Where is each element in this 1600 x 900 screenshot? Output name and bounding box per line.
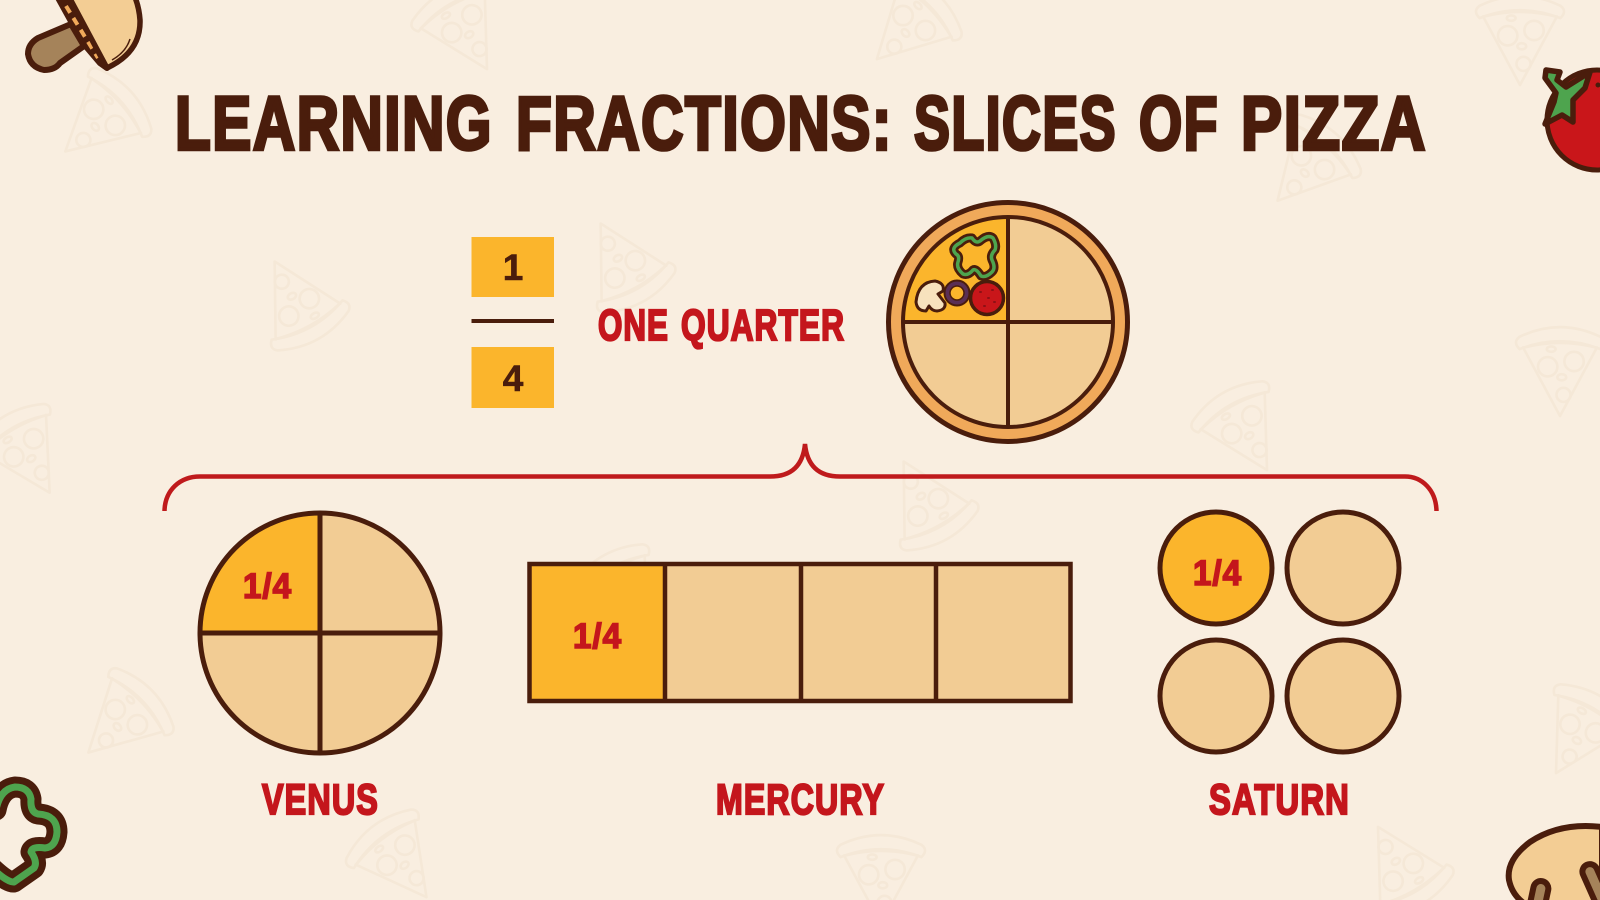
label: one quarter: QUARTER [681, 301, 845, 350]
panel: saturn circles model [1160, 512, 1399, 752]
crust [888, 202, 1128, 442]
topping: pepperoni [970, 282, 1004, 314]
title: SLICES [914, 82, 1117, 166]
panel: mercury bar model [530, 564, 1070, 701]
slice outlines [903, 217, 1113, 427]
outlines [530, 564, 1070, 701]
topping: mushroom [916, 281, 945, 311]
fraction label: 1/4 [243, 567, 292, 606]
highlighted quarter [903, 217, 1008, 322]
numerator box [472, 237, 554, 297]
title: PIZZA [1241, 82, 1427, 166]
topping: green pepper [954, 237, 996, 276]
denominator box: 4 [503, 358, 524, 399]
topping: green pepper inner [954, 237, 996, 276]
highlighted quarter [200, 513, 320, 633]
title: LEARNING [175, 82, 493, 166]
panel: venus circle model [200, 513, 440, 753]
title: OF [1139, 82, 1219, 166]
fraction one quarter [472, 237, 554, 408]
numerator box: 1 [503, 247, 523, 288]
icon: mushroom top left [28, 0, 140, 70]
title: FRACTIONS: [516, 82, 893, 166]
icon: green pepper bottom left [0, 787, 57, 882]
fraction label: 1/4 [573, 617, 622, 656]
highlighted circle [1160, 512, 1272, 624]
label: saturn: SATURN [1209, 776, 1350, 824]
topping: olive [944, 280, 970, 306]
icon: tomato top right [1545, 70, 1600, 170]
fraction bar [472, 319, 554, 323]
label: one quarter: ONE [598, 301, 669, 350]
icon: mushroom bottom right [1509, 826, 1600, 900]
outlines [200, 513, 440, 753]
pizza illustration [888, 202, 1128, 442]
label: mercury: MERCURY [716, 776, 885, 824]
pizza base [903, 217, 1113, 427]
fraction label: 1/4 [1193, 554, 1242, 593]
denominator box [472, 347, 554, 408]
curly brace [164, 444, 1436, 511]
label: venus: VENUS [262, 776, 379, 824]
highlighted quarter [530, 564, 664, 701]
